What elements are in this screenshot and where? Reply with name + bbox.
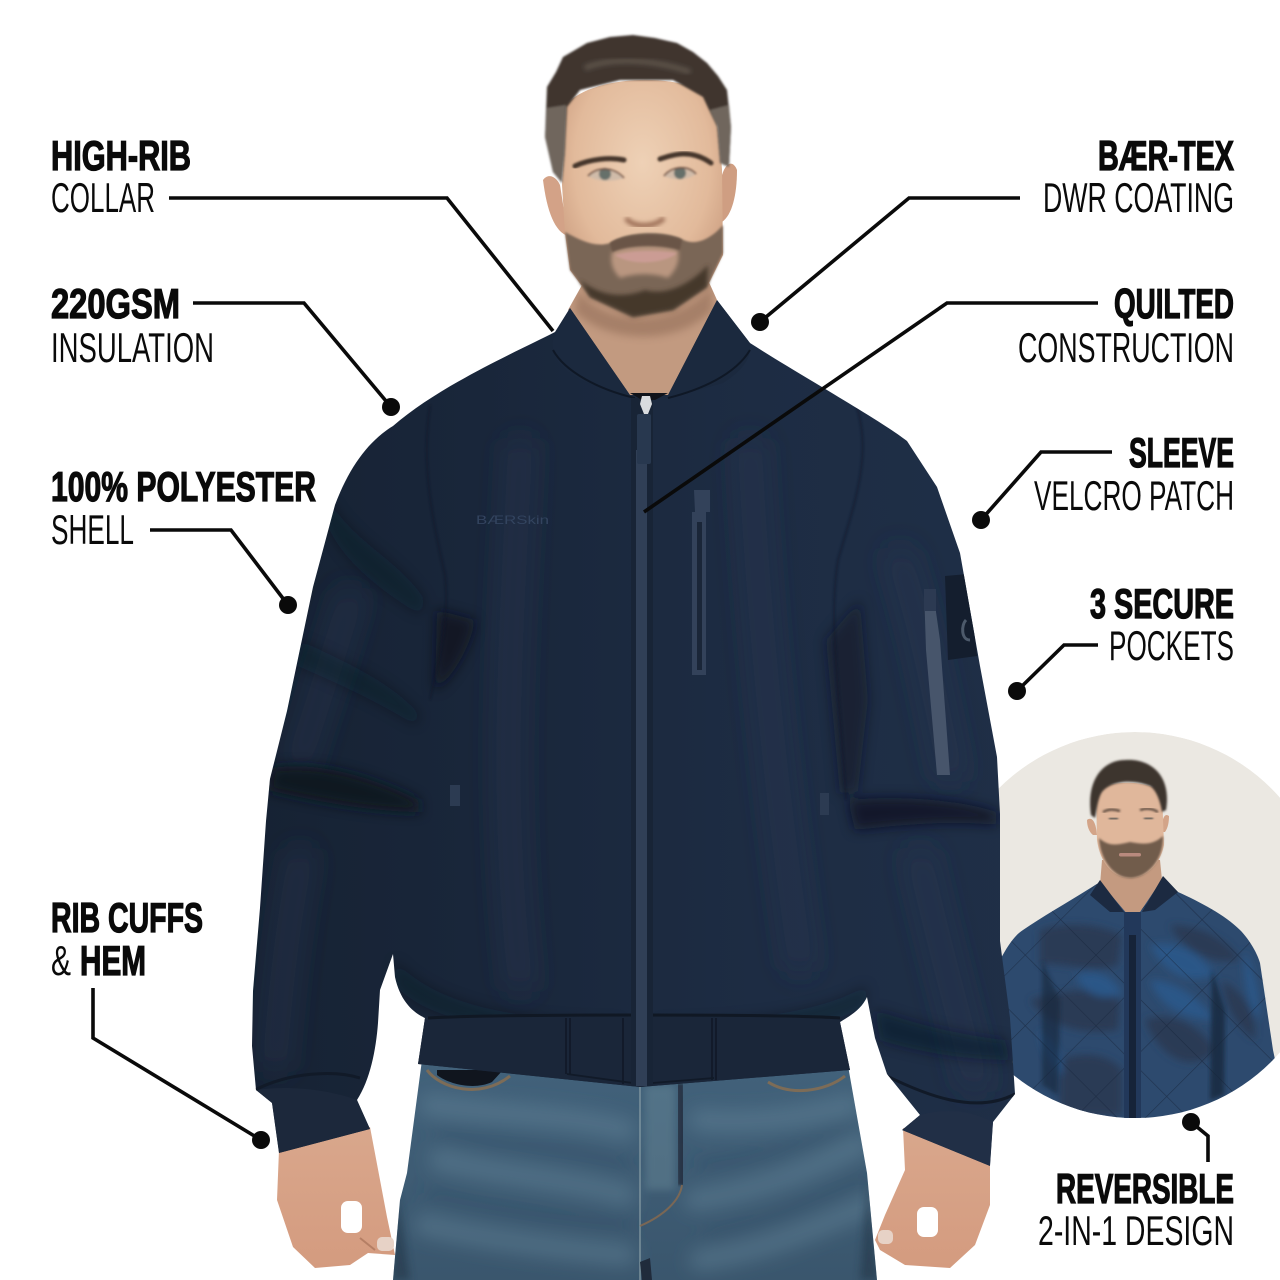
- callout: high-rib collar: COLLAR: [51, 174, 155, 221]
- eyebrows: [575, 154, 711, 166]
- fly and pocket details: [639, 1085, 641, 1280]
- lips: [615, 251, 677, 262]
- callout: baer-tex dwr coating: [751, 132, 1234, 331]
- callout: polyester shell: 100% POLYESTER: [51, 463, 316, 510]
- callout: rib cuffs and hem: &: [51, 937, 71, 984]
- logo: BÆRSkin: [476, 513, 549, 527]
- hair: [545, 35, 731, 183]
- callout: polyester shell: SHELL: [51, 506, 134, 553]
- jacket silhouette: [240, 290, 1030, 1180]
- callout: high-rib collar: [51, 132, 553, 331]
- inset circle: reversible jacket view: [998, 732, 1280, 1118]
- jeans: [390, 1055, 885, 1280]
- sleeve velcro patch: [945, 574, 977, 660]
- rib hem: [416, 1016, 852, 1090]
- neck: [568, 280, 717, 395]
- main figure: man wearing navy bomber jacket: [240, 35, 1030, 1280]
- raglan seams: [833, 407, 864, 798]
- callout: 220gsm insulation: 220GSM: [51, 280, 180, 327]
- left hand: [277, 1127, 395, 1268]
- main zipper: [631, 398, 653, 1086]
- callout: 3 secure pockets: [1008, 580, 1234, 700]
- ears: [543, 176, 568, 236]
- callout: high-rib collar: HIGH-RIB: [51, 132, 191, 179]
- hand pocket zippers: [450, 785, 829, 815]
- sleeve pocket zipper: [924, 611, 950, 775]
- jacket fold shadows: [268, 500, 1010, 1060]
- callout: 220gsm insulation: INSULATION: [51, 324, 214, 371]
- jacket fabric highlights: [265, 610, 352, 1060]
- undershirt and zipper pull: [630, 393, 668, 414]
- face: [562, 80, 723, 317]
- nose: [626, 218, 664, 226]
- collar: [568, 300, 750, 395]
- eyes: [588, 167, 696, 181]
- callout: reversible 2-in-1 design: [1038, 1113, 1234, 1254]
- callout: 220gsm insulation: [51, 280, 400, 416]
- callout: polyester shell: [51, 463, 316, 614]
- chest pocket zipper: [692, 490, 710, 675]
- inset man neck and head: [1087, 760, 1169, 915]
- left cuff: [256, 1088, 370, 1153]
- inset quilted camo jacket: [1002, 876, 1275, 1118]
- callout: rib cuffs and hem: RIB CUFFS: [51, 894, 203, 941]
- callout: quilted construction: [644, 280, 1234, 512]
- right cuff: [902, 1111, 993, 1166]
- head: [543, 35, 737, 317]
- callout: sleeve velcro patch: [972, 429, 1234, 529]
- right hand: [875, 1128, 990, 1268]
- callout: rib cuffs and hem: HEM: [80, 937, 146, 984]
- callout: rib cuffs and hem: [51, 894, 270, 1149]
- beard: [565, 225, 723, 317]
